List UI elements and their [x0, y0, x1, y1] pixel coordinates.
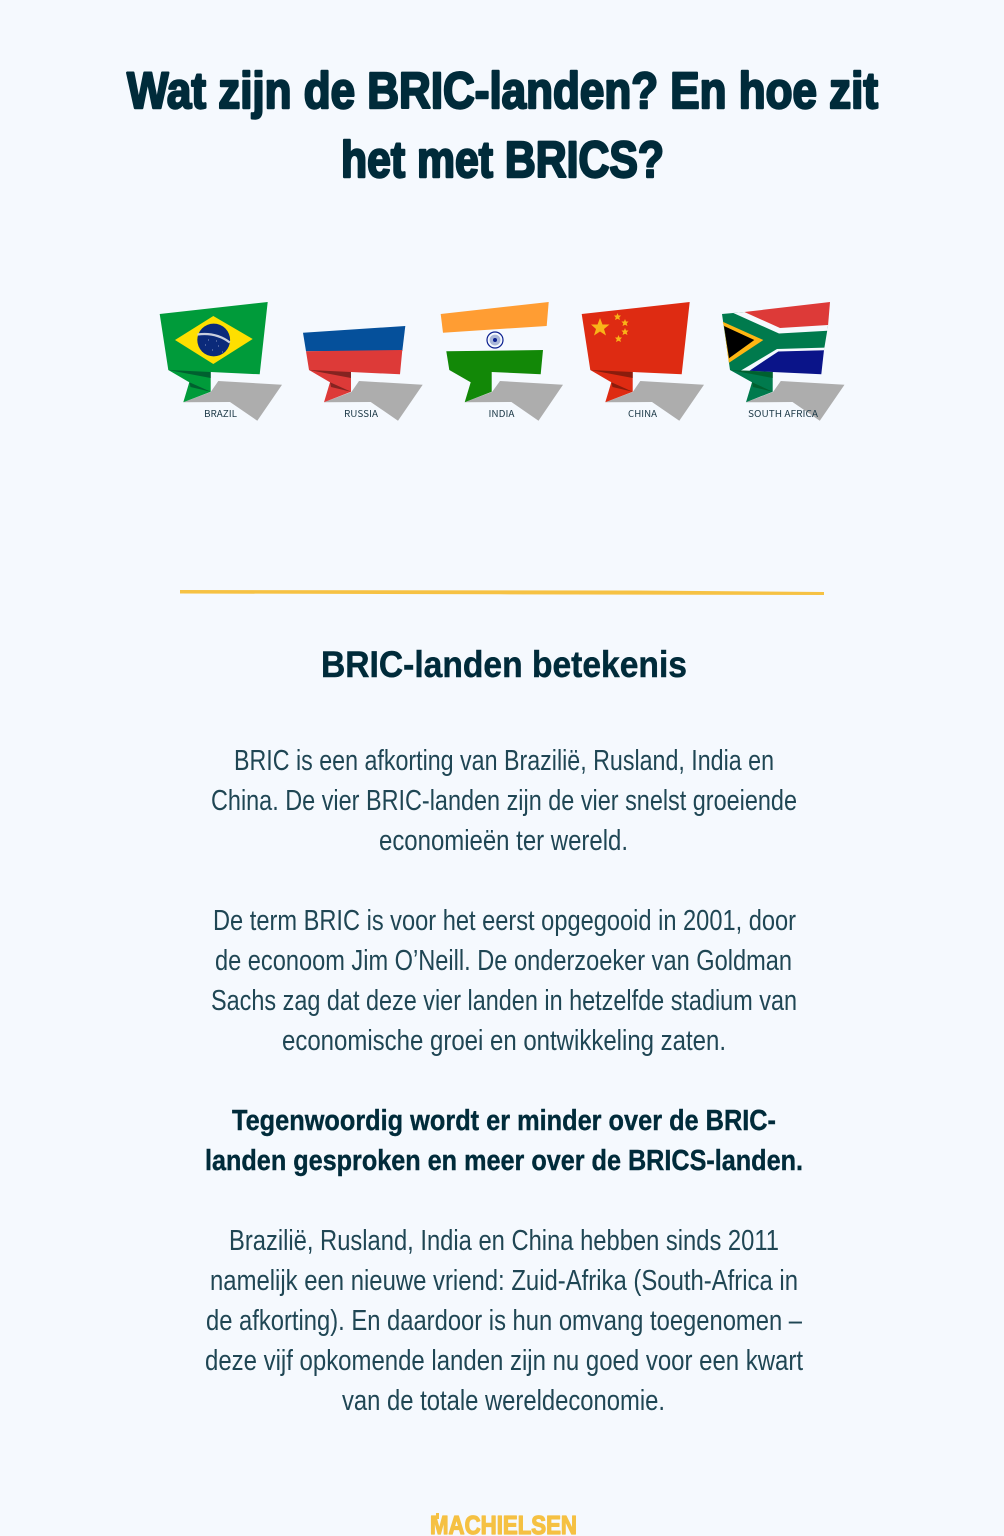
paragraph 4: deze vijf opkomende landen zijn nu goed voor een kwart [205, 1345, 803, 1377]
title: Wat zijn de BRIC-landen? En hoe zit [127, 62, 878, 119]
flag: China [582, 302, 704, 421]
paragraph 4: Brazilië, Rusland, India en China hebben sinds 2011 [229, 1225, 779, 1257]
paragraph 1: BRIC is een afkorting van Brazilië, Rusland, India en [234, 745, 774, 777]
paragraph 4: de afkorting). En daardoor is hun omvang toegenomen – [206, 1305, 803, 1337]
flags row [160, 302, 844, 421]
flag: China: CHINA [628, 406, 657, 420]
paragraph 4 [205, 1225, 803, 1417]
heading: BRIC-landen betekenis [321, 644, 687, 685]
divider [180, 590, 824, 595]
paragraph 2 [211, 905, 797, 1057]
flag: South Africa [722, 302, 844, 421]
paragraph 2: Sachs zag dat deze vier landen in hetzelfde stadium van [211, 985, 797, 1017]
flag: India [441, 302, 563, 421]
paragraph 3: bold statement [205, 1105, 803, 1177]
flag: Brazil: BRAZIL [204, 406, 237, 420]
paragraph 2: de econoom Jim O’Neill. De onderzoeker van Goldman [215, 945, 792, 977]
paragraph 3: bold statement: Tegenwoordig wordt er minder over de BRIC- [232, 1105, 776, 1137]
flag: India: INDIA [488, 406, 515, 420]
title: het met BRICS? [341, 131, 664, 188]
flag: South Africa: SOUTH AFRICA [748, 406, 818, 420]
flag: Russia [303, 326, 423, 421]
paragraph 4: van de totale wereldeconomie. [342, 1385, 665, 1417]
paragraph 1: economieën ter wereld. [379, 825, 628, 857]
paragraph 4: namelijk een nieuwe vriend: Zuid-Afrika (South-Africa in [210, 1265, 798, 1297]
flag: Russia: RUSSIA [344, 406, 378, 420]
paragraph 3: bold statement: landen gesproken en meer over de BRICS-landen. [205, 1145, 803, 1177]
paragraph 1 [211, 745, 797, 857]
flag: Brazil [160, 302, 282, 421]
paragraph 2: De term BRIC is voor het eerst opgegooid in 2001, door [213, 905, 796, 937]
paragraph 1: China. De vier BRIC-landen zijn de vier snelst groeiende [211, 785, 797, 817]
title [127, 62, 878, 188]
paragraph 2: economische groei en ontwikkeling zaten. [282, 1025, 726, 1057]
